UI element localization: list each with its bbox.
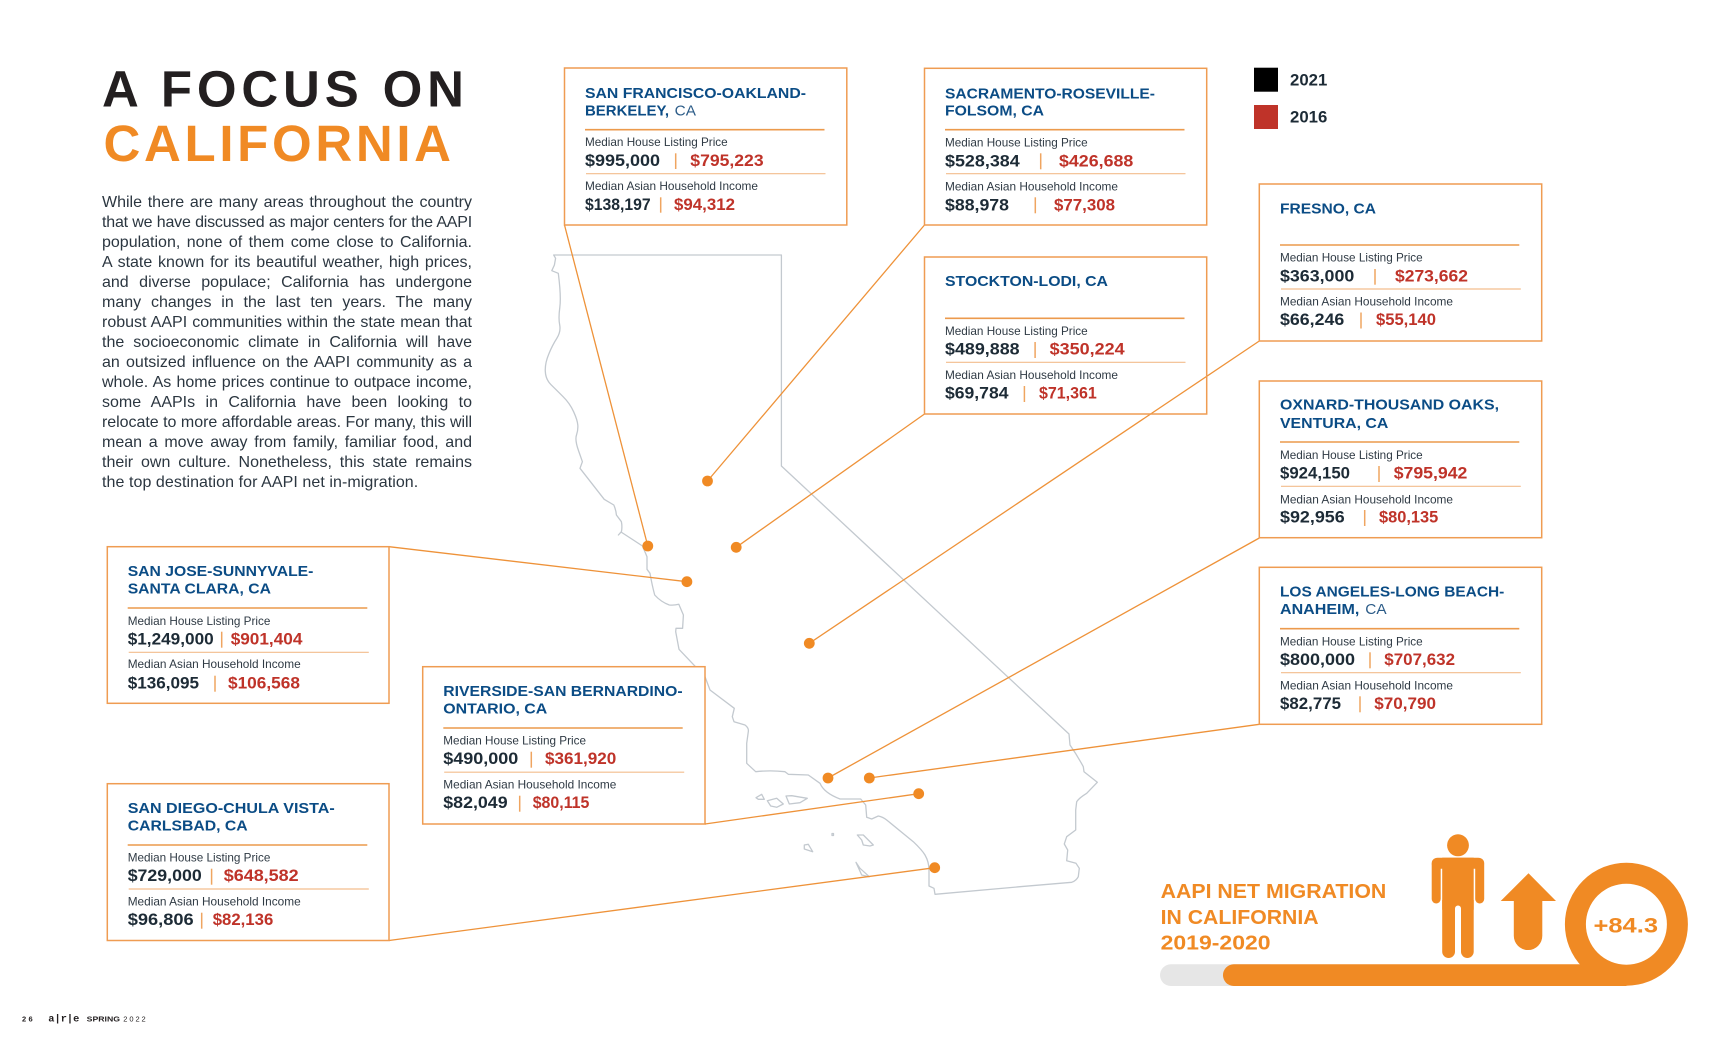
panel: San Francisco-Oakland-Berkeley: $995,000	[585, 152, 660, 170]
migration heading: 2019-2020	[1161, 932, 1271, 954]
panel: Fresno: Median Asian Household Income	[1280, 295, 1453, 309]
panel: Oxnard-Thousand Oaks-Ventura: $924,150	[1280, 464, 1350, 482]
panel: Los Angeles-Long Beach-Anaheim: LOS ANGELES-LONG BEACH-	[1280, 584, 1504, 601]
panel: San Francisco-Oakland-Berkeley: $94,312	[674, 196, 735, 214]
city markers	[642, 476, 940, 873]
panel: Sacramento-Roseville-Folsom: Median House Listing Price	[945, 135, 1088, 149]
panel: Sacramento-Roseville-Folsom: $426,688	[1059, 152, 1133, 170]
panel: Fresno: $363,000	[1280, 267, 1354, 285]
panel: Sacramento-Roseville-Folsom: $528,384	[945, 152, 1021, 170]
panel: San Jose-Sunnyvale-Santa Clara	[107, 547, 389, 703]
text block: intro paragraph: population, none of them come close to California.	[102, 234, 472, 250]
panel: San Diego-Chula Vista-Carlsbad: Median Asian Household Income	[128, 895, 301, 909]
panel: Oxnard-Thousand Oaks-Ventura: VENTURA, CA	[1280, 415, 1388, 432]
panel: San Francisco-Oakland-Berkeley: SAN FRANCISCO-OAKLAND-	[585, 85, 806, 102]
panel: San Jose-Sunnyvale-Santa Clara: SAN JOSE-SUNNYVALE-	[128, 563, 313, 580]
panel: Riverside-San Bernardino-Ontario: Median Asian Household Income	[443, 778, 617, 792]
panel: Riverside-San Bernardino-Ontario: $82,049	[443, 794, 508, 812]
panel: Stockton-Lodi: STOCKTON-LODI, CA	[945, 273, 1108, 290]
title	[102, 61, 464, 172]
panel: Stockton-Lodi: $489,888	[945, 340, 1020, 358]
panel: San Francisco-Oakland-Berkeley: Median House Listing Price	[585, 135, 728, 149]
panel: Oxnard-Thousand Oaks-Ventura: $795,942	[1394, 464, 1467, 482]
text block: intro paragraph: many changes in the last ten years. The many	[102, 294, 472, 310]
text block: intro paragraph: robust AAPI communities within the state mean that	[102, 314, 472, 330]
panel: Los Angeles-Long Beach-Anaheim: Median House Listing Price	[1280, 634, 1423, 648]
title: CALIFORNIA	[104, 115, 451, 172]
footer: a|r|e	[48, 1014, 79, 1026]
icon: up arrow	[1501, 873, 1556, 950]
panel: Oxnard-Thousand Oaks-Ventura: $80,135	[1379, 508, 1438, 526]
footer: 2022	[123, 1015, 146, 1024]
panel: Sacramento-Roseville-Folsom: SACRAMENTO-ROSEVILLE-	[945, 85, 1155, 102]
panel: San Francisco-Oakland-Berkeley: CA	[675, 102, 696, 119]
panel: Los Angeles-Long Beach-Anaheim: Median Asian Household Income	[1280, 678, 1453, 692]
panel: Sacramento-Roseville-Folsom: $77,308	[1054, 196, 1115, 214]
panel: Stockton-Lodi: $71,361	[1039, 384, 1097, 402]
value: +84.3	[1594, 914, 1658, 938]
text block: intro paragraph: While there are many areas throughout the country	[102, 194, 472, 210]
panel: Stockton-Lodi	[924, 257, 1207, 414]
panel: Stockton-Lodi: Median Asian Household Income	[945, 368, 1118, 382]
panel: San Diego-Chula Vista-Carlsbad: $96,806	[128, 911, 194, 929]
panel: San Diego-Chula Vista-Carlsbad: $648,582	[224, 867, 299, 885]
panel: Sacramento-Roseville-Folsom: $88,978	[945, 196, 1009, 214]
text block: intro paragraph: that we have discussed as major centers for the AAPI	[102, 214, 472, 230]
panel: Los Angeles-Long Beach-Anaheim	[1259, 567, 1542, 724]
panel: San Francisco-Oakland-Berkeley: $795,223	[690, 152, 764, 170]
panel: Los Angeles-Long Beach-Anaheim: $70,790	[1374, 695, 1436, 713]
panel: Fresno: Median House Listing Price	[1280, 251, 1423, 265]
migration heading: IN CALIFORNIA	[1161, 907, 1319, 929]
panel: San Jose-Sunnyvale-Santa Clara: SANTA CLARA, CA	[128, 580, 271, 597]
title: A FOCUS ON	[102, 61, 464, 118]
panel: Riverside-San Bernardino-Ontario: $361,920	[545, 750, 616, 768]
panel: Fresno: $273,662	[1395, 267, 1468, 285]
panel: Oxnard-Thousand Oaks-Ventura: $92,956	[1280, 508, 1345, 526]
panel: Oxnard-Thousand Oaks-Ventura: Median House Listing Price	[1280, 448, 1423, 462]
footer: 26	[22, 1015, 33, 1024]
panel: San Francisco-Oakland-Berkeley: Median Asian Household Income	[585, 179, 758, 193]
panel: Riverside-San Bernardino-Ontario: $80,115	[533, 794, 589, 812]
panel: Oxnard-Thousand Oaks-Ventura: OXNARD-THOUSAND OAKS,	[1280, 396, 1499, 414]
panel: Oxnard-Thousand Oaks-Ventura	[1259, 381, 1542, 538]
panel: Oxnard-Thousand Oaks-Ventura: Median Asian Household Income	[1280, 492, 1453, 506]
panel: San Diego-Chula Vista-Carlsbad: SAN DIEGO-CHULA VISTA-	[128, 800, 335, 817]
panel: Riverside-San Bernardino-Ontario: ONTARIO, CA	[443, 701, 547, 718]
panel: Riverside-San Bernardino-Ontario: RIVERSIDE-SAN BERNARDINO-	[443, 683, 683, 700]
leader lines from panels to city markers	[389, 225, 1259, 940]
text block: intro paragraph: the top destination for AAPI net in-migration.	[102, 474, 418, 490]
panel: Stockton-Lodi: Median House Listing Price	[945, 324, 1088, 338]
text block: intro paragraph: A state known for its beautiful weather, high prices,	[102, 254, 472, 270]
orange bar and ring	[1223, 873, 1677, 986]
panel: San Jose-Sunnyvale-Santa Clara: $136,095	[128, 674, 199, 692]
footer: SPRING	[87, 1015, 120, 1024]
text block: intro paragraph: their own culture. Nonetheless, this state remains	[102, 454, 472, 470]
panel: Sacramento-Roseville-Folsom: FOLSOM, CA	[945, 102, 1044, 119]
progress track	[1160, 964, 1280, 986]
panel: Los Angeles-Long Beach-Anaheim: $707,632	[1384, 651, 1455, 669]
panel: San Jose-Sunnyvale-Santa Clara: $106,568	[228, 674, 300, 692]
callout: AAPI net migration	[1160, 834, 1677, 986]
panel: San Francisco-Oakland-Berkeley: $138,197	[585, 196, 651, 214]
panel: San Jose-Sunnyvale-Santa Clara: Median House Listing Price	[128, 614, 271, 628]
text block: intro paragraph: whole. As home prices continue to outpace income,	[102, 374, 472, 390]
panel: Los Angeles-Long Beach-Anaheim: $800,000	[1280, 651, 1355, 669]
panel: Stockton-Lodi: $350,224	[1050, 340, 1125, 358]
panel: Los Angeles-Long Beach-Anaheim: CA	[1365, 601, 1387, 618]
panel: San Jose-Sunnyvale-Santa Clara: $901,404	[231, 630, 303, 648]
migration heading	[1161, 881, 1386, 954]
panel: Fresno: FRESNO, CA	[1280, 200, 1376, 217]
panel: Sacramento-Roseville-Folsom	[924, 68, 1207, 225]
panel: San Diego-Chula Vista-Carlsbad: Median House Listing Price	[128, 851, 271, 865]
panel: San Francisco-Oakland-Berkeley: BERKELEY,	[585, 102, 669, 119]
text block: intro paragraph: mean a move away from family, familiar food, and	[102, 434, 472, 450]
panel: Riverside-San Bernardino-Ontario: Median House Listing Price	[443, 734, 586, 748]
icon: person	[1432, 834, 1484, 958]
panel: Sacramento-Roseville-Folsom: Median Asian Household Income	[945, 179, 1118, 193]
panel: Fresno	[1259, 184, 1542, 341]
text block: intro paragraph: some AAPIs in California have been looking to	[102, 394, 472, 410]
panel: Fresno: $66,246	[1280, 311, 1344, 329]
legend: 2016	[1290, 108, 1327, 126]
footer	[22, 1014, 146, 1026]
panel: San Diego-Chula Vista-Carlsbad: $729,000	[128, 867, 202, 885]
text block: intro paragraph: relocate to more affordable areas. For many, this will	[102, 414, 472, 430]
panel: San Diego-Chula Vista-Carlsbad: $82,136	[213, 911, 273, 929]
panel: San Jose-Sunnyvale-Santa Clara: $1,249,000	[128, 630, 214, 648]
legend: 2021	[1290, 72, 1327, 90]
panel: San Diego-Chula Vista-Carlsbad: CARLSBAD, CA	[128, 817, 248, 834]
panel: Los Angeles-Long Beach-Anaheim: ANAHEIM,	[1280, 601, 1359, 618]
text block: intro paragraph: and diverse populace; California has undergone	[102, 274, 472, 290]
panel: San Diego-Chula Vista-Carlsbad	[107, 784, 389, 940]
migration heading: AAPI NET MIGRATION	[1161, 881, 1386, 903]
text block: intro paragraph: an outsized influence on the AAPI community as a	[102, 354, 472, 370]
legend	[1254, 68, 1327, 129]
panel: San Jose-Sunnyvale-Santa Clara: Median Asian Household Income	[128, 657, 301, 671]
text block: intro paragraph: the socioeconomic climate in California will have	[102, 334, 472, 350]
text block: intro paragraph	[102, 194, 472, 490]
panel: Riverside-San Bernardino-Ontario: $490,000	[443, 750, 518, 768]
panel: Los Angeles-Long Beach-Anaheim: $82,775	[1280, 695, 1341, 713]
panel: Stockton-Lodi: $69,784	[945, 384, 1009, 402]
panel: San Francisco-Oakland-Berkeley	[564, 68, 847, 225]
panel: Fresno: $55,140	[1376, 311, 1436, 329]
panel: Riverside-San Bernardino-Ontario	[423, 667, 705, 824]
map: California outline	[545, 255, 1097, 894]
